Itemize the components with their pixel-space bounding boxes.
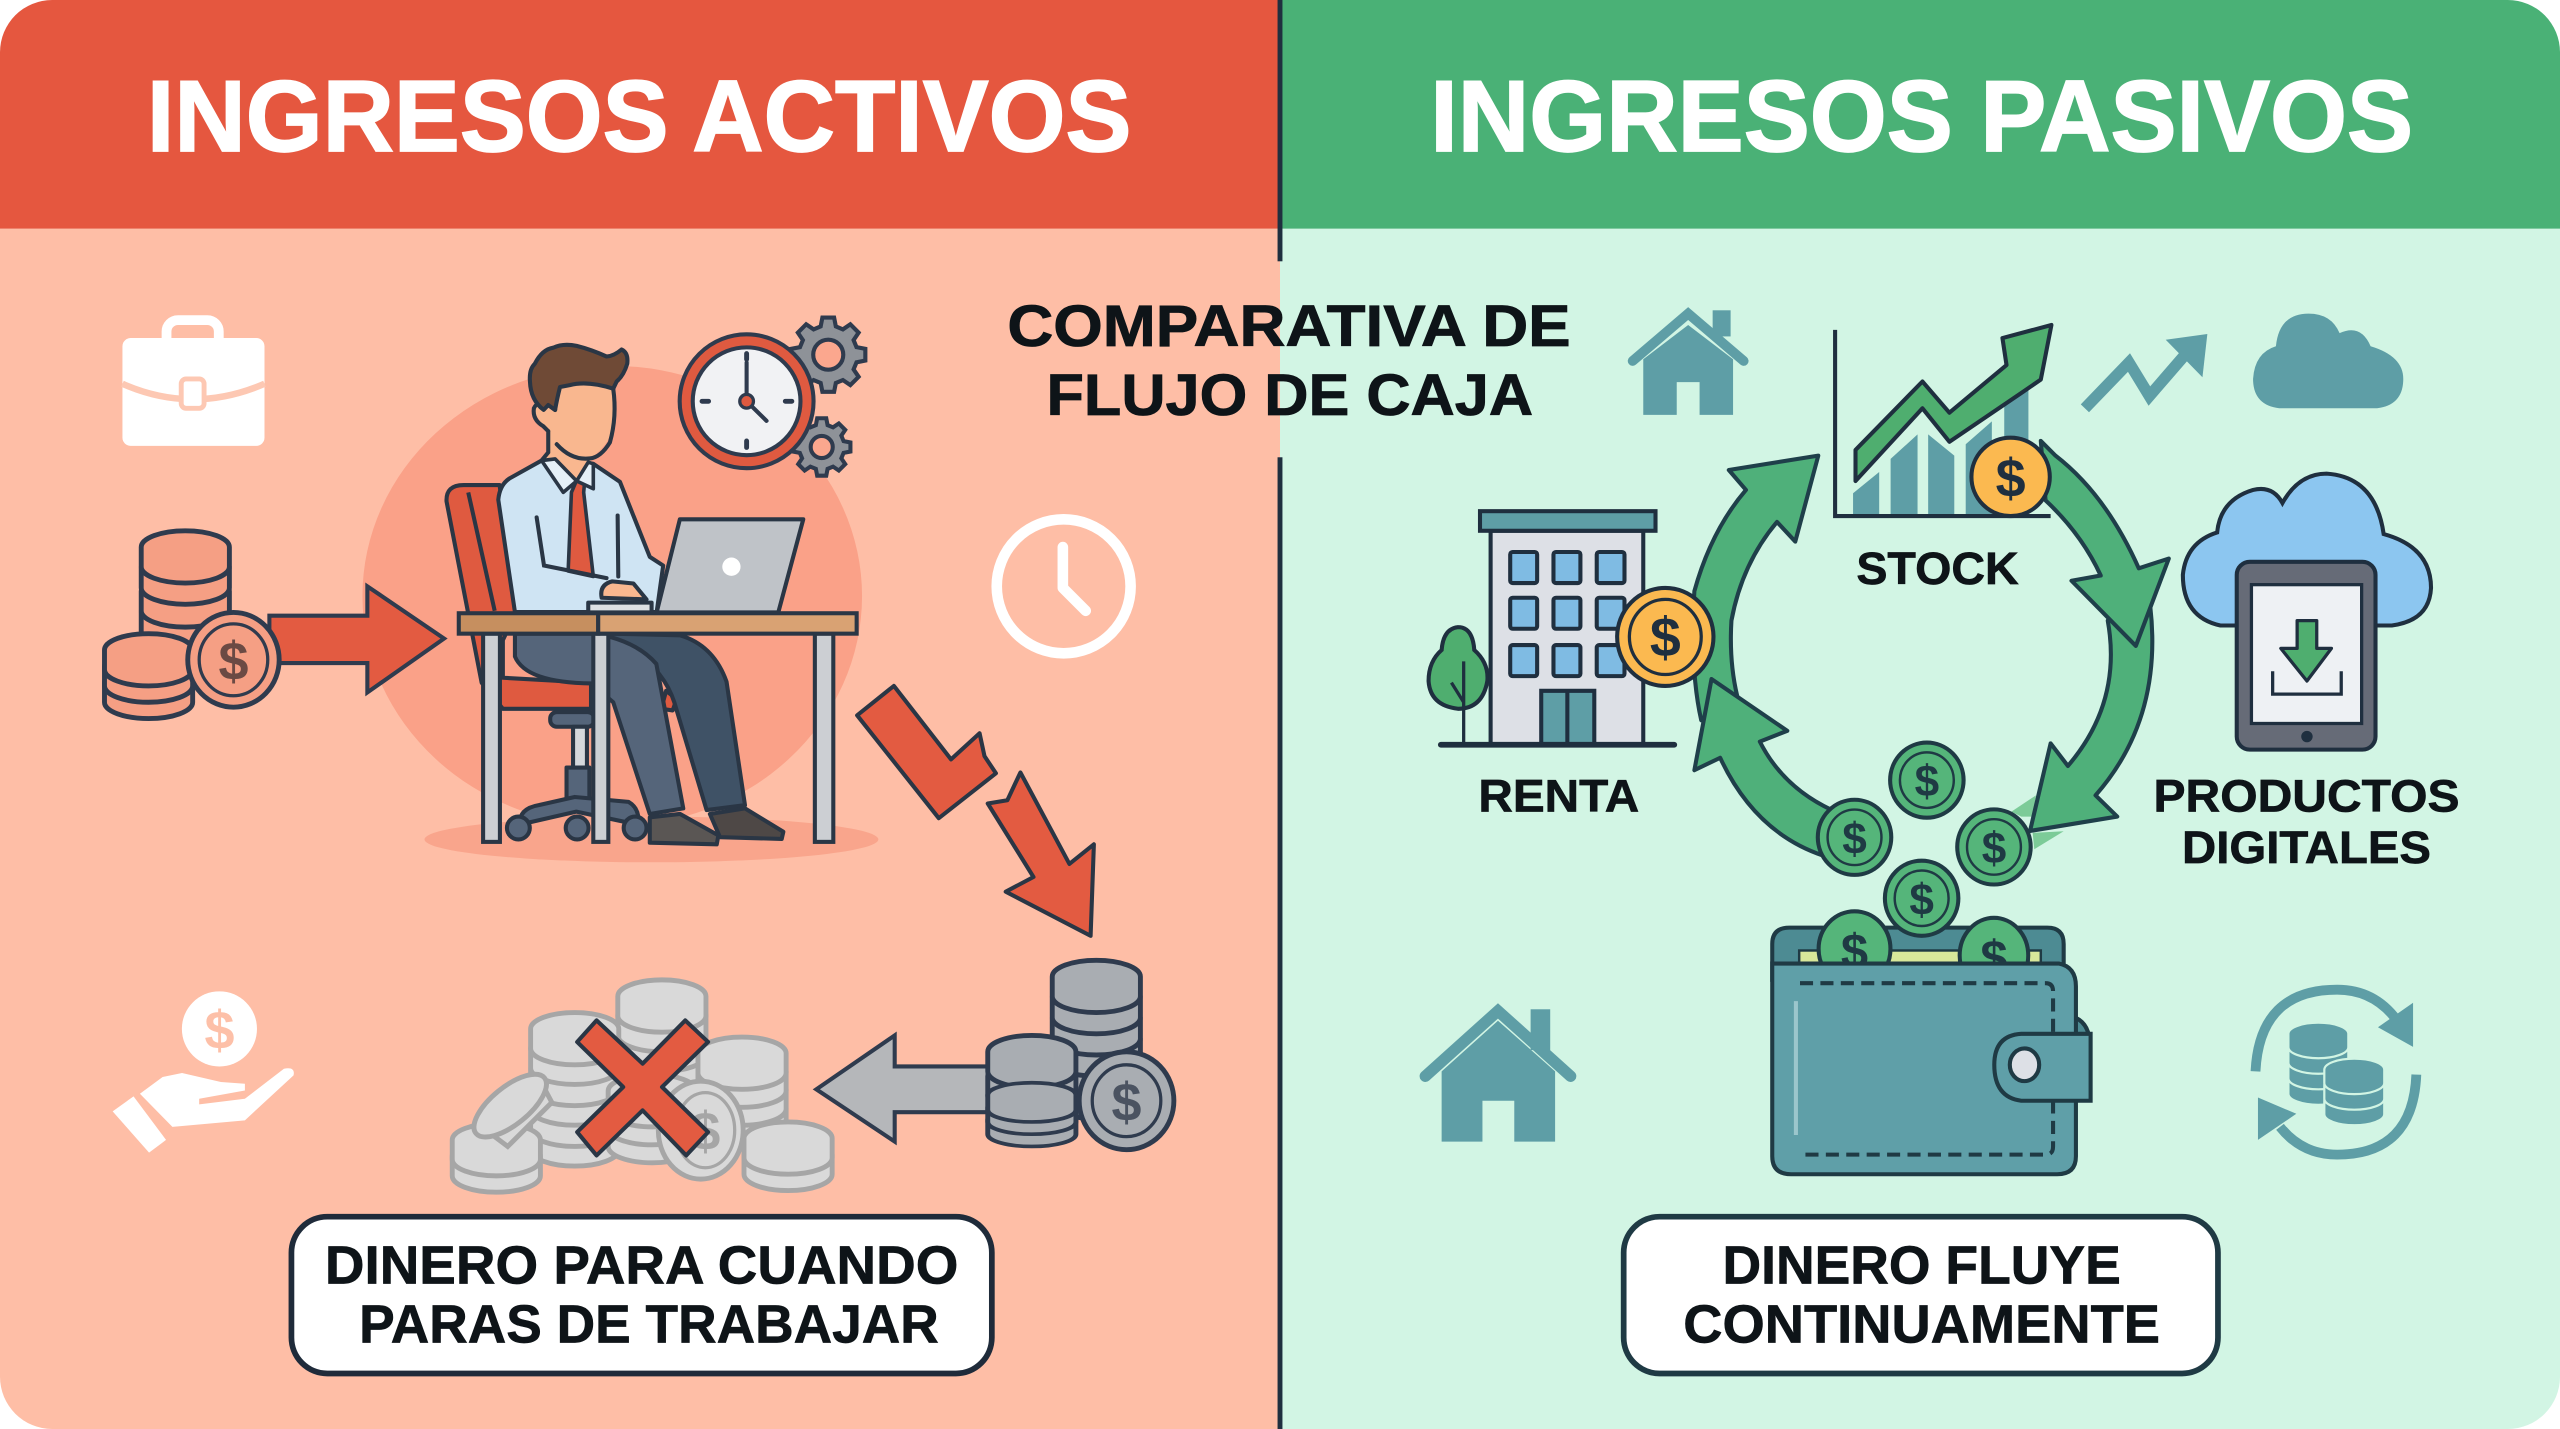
icon: hand with coin [113,991,294,1153]
arrow: income to worker [269,586,444,692]
icon: clock with gears [680,318,865,476]
windows [1510,552,1624,676]
label: renta: RENTA [1478,771,1639,822]
illustration: dark coins stack [988,960,1174,1150]
label: productos digitales [2153,771,2460,873]
backdrop circle [362,366,862,826]
illustration: rental building [1429,511,1674,745]
tilted coin [482,1078,552,1146]
gears [791,318,865,476]
illustration: lost grey coins: $ [690,1102,720,1162]
chart: stock bars and arrow [1835,325,2051,516]
icon: stock gold coin: $ [1996,448,2026,508]
label: productos digitales: DIGITALES [2182,822,2431,873]
illustration: lost grey coins [452,980,832,1192]
hair [530,345,627,410]
callout: dinero fluye continuamente: CONTINUAMENTE [1683,1294,2160,1354]
front coin [658,1081,743,1179]
cash [1799,950,2041,970]
central title [1007,294,1571,428]
illustration: cloud and tablet [2183,474,2431,750]
wallet front [1772,964,2076,1174]
illustration: person working at desk [362,345,878,862]
icon: teal cloud [2253,314,2403,408]
falling coins: $ [1915,757,1939,806]
tree [1429,627,1488,745]
icon: hand with coin: $ [204,1000,234,1060]
neck and face [534,385,615,493]
icon: teal house top [1633,310,1744,415]
central title: COMPARATIVA DE [1007,294,1571,359]
red cross [577,1020,708,1155]
falling coins: $ [1842,814,1867,863]
hand [601,581,647,599]
wallet bump [2070,1016,2090,1097]
desk [459,613,857,842]
icon: stock gold coin [1971,438,2050,516]
wallet strap [1994,1034,2091,1101]
face outline [534,389,615,461]
arrows: cash flow cycle [1693,441,2169,856]
callout: dinero para cuando paras de trabajar: DINERO PARA CUANDO [325,1236,958,1296]
building body [1491,531,1643,745]
coins in wallet: $ [1980,932,2008,986]
clock face [680,334,814,468]
coins in wallet [1816,909,2030,962]
icon: recycling coins [2256,990,2416,1155]
heading: ingresos pasivos: INGRESOS PASIVOS [1430,60,2413,173]
callout: dinero fluye continuamente [1624,1217,2218,1373]
shirt [498,461,663,612]
heading: ingresos activos: INGRESOS ACTIVOS [147,60,1131,173]
collar [542,459,593,492]
icon: coins flowing in: $ [218,631,248,691]
callout: dinero para cuando paras de trabajar: PARAS DE TRABAJAR [359,1294,939,1354]
ground shadow [424,817,878,862]
icon: rent gold coin [1617,588,1713,686]
falling coins: $ [1982,824,2006,873]
label: productos digitales: PRODUCTOS [2153,771,2460,822]
central title: FLUJO DE CAJA [1047,363,1533,428]
icon: rent gold coin: $ [1650,607,1681,669]
arrow: broken descending arrow [857,686,1094,936]
label: stock: STOCK [1856,543,2019,594]
arm [537,516,618,578]
arrow: grey outgoing [816,1035,1004,1142]
falling coins [1818,743,2031,936]
trousers [515,634,745,814]
icon: teal trend arrow [2085,334,2207,408]
door [1541,691,1594,745]
illustration: wallet with falling coins [1772,743,2091,1174]
tie [568,481,593,576]
callout: dinero fluye continuamente: DINERO FLUYE [1722,1236,2121,1296]
icon: teal house bottom [1425,1009,1571,1142]
icon: coins flowing in [104,531,444,719]
shoes [650,808,783,844]
icon: white clock [997,519,1131,653]
coins in wallet: $ [1841,925,1868,979]
laptop [588,519,803,612]
callout: dinero para cuando paras de trabajar [291,1217,992,1373]
chair [446,485,677,839]
icon: briefcase [122,320,264,446]
wallet back [1772,928,2064,980]
illustration: dark coins stack: $ [1112,1072,1142,1132]
falling coins: $ [1909,876,1934,925]
